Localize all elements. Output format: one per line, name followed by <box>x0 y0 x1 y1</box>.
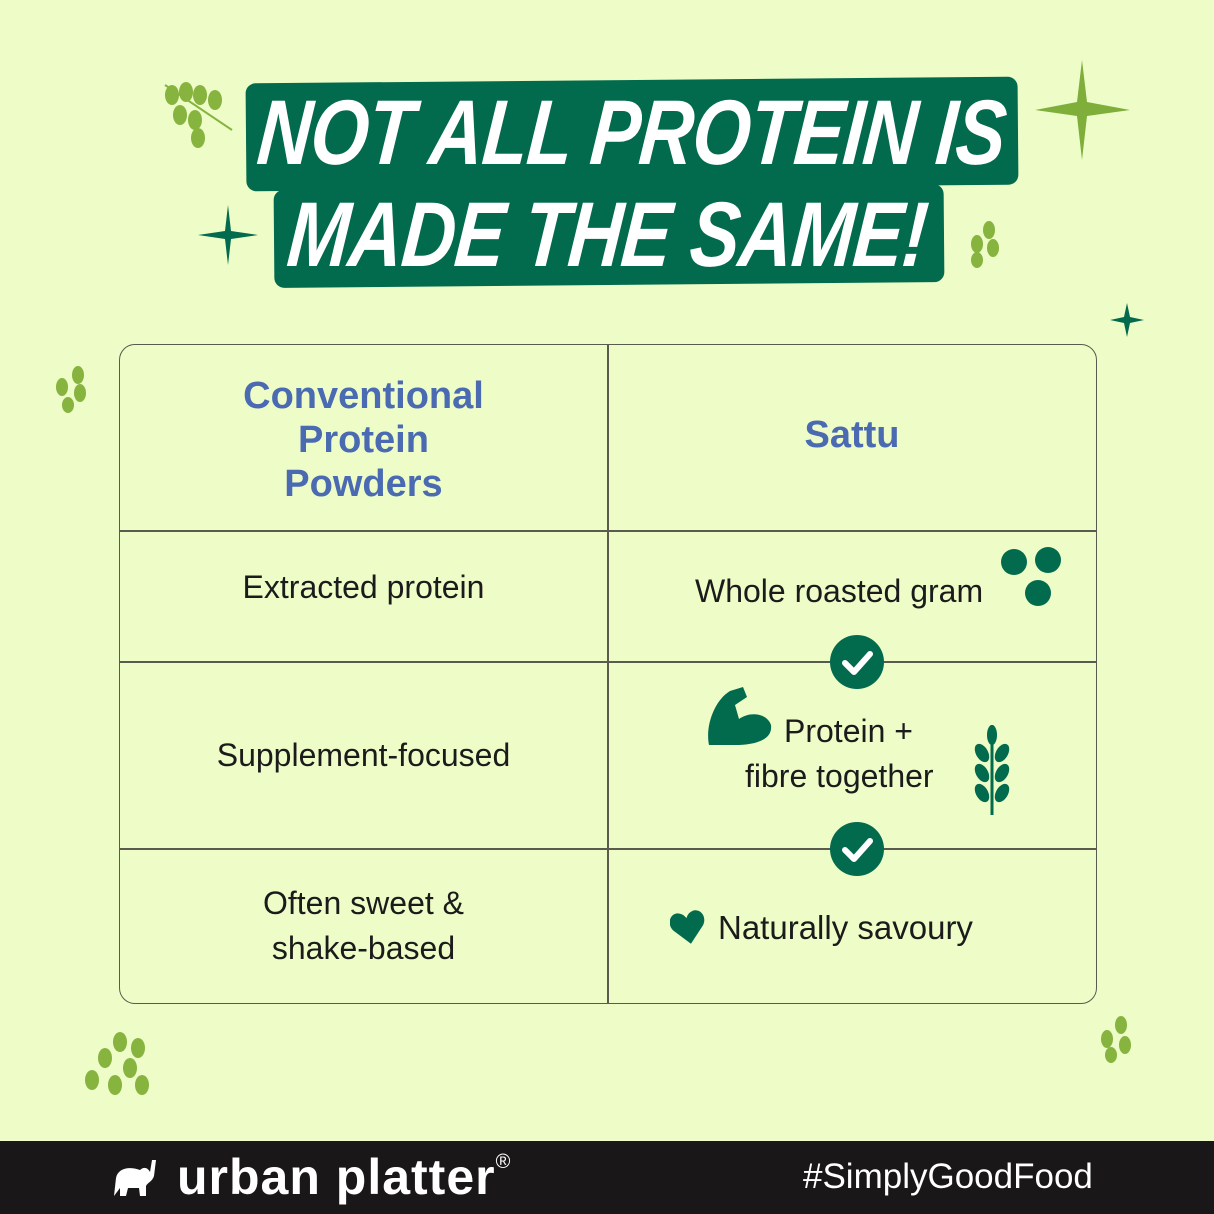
comparison table <box>119 344 1097 1004</box>
text: protein fibre: fibre together <box>745 758 934 794</box>
header: conventional: Conventional <box>243 375 484 417</box>
icon: gram <box>1001 547 1061 606</box>
icon: leaves <box>1101 1016 1131 1063</box>
icon: sparkle large <box>1035 60 1130 160</box>
icon: leaves <box>971 221 999 268</box>
icon: heart <box>670 910 704 944</box>
icon: leaves <box>164 82 232 148</box>
text: often sweet: Often sweet & <box>263 885 464 921</box>
title <box>246 76 1018 288</box>
icon: leaves <box>85 1032 149 1095</box>
icon: muscle <box>708 687 772 745</box>
title: NOT ALL PROTEIN IS <box>254 82 1010 184</box>
hashtag: #SimplyGoodFood <box>803 1157 1093 1196</box>
text: protein fibre <box>745 713 934 794</box>
header: conventional: Protein <box>298 419 429 461</box>
icon: leaves <box>56 366 86 413</box>
icon: check 1 <box>830 635 884 689</box>
text: supplement: Supplement-focused <box>217 736 510 772</box>
text: often sweet: shake-based <box>272 930 455 966</box>
footer <box>0 1141 1214 1214</box>
header: conventional: Powders <box>284 463 443 505</box>
icon: sparkle small <box>198 205 258 265</box>
text: whole roasted gram: Whole roasted gram <box>695 573 983 609</box>
header: conventional <box>243 375 484 505</box>
logo text: urban platter® <box>177 1149 511 1205</box>
icon: wheat <box>974 725 1010 815</box>
text: naturally savoury: Naturally savoury <box>718 909 973 946</box>
text: extracted: Extracted protein <box>243 568 484 604</box>
icon: sparkle right <box>1110 303 1144 337</box>
title: MADE THE SAME! <box>284 184 931 286</box>
icon: check 2 <box>830 822 884 876</box>
text: protein fibre: Protein + <box>784 713 913 749</box>
header: sattu: Sattu <box>804 414 900 456</box>
text: often sweet <box>263 885 464 966</box>
icon: elephant <box>114 1160 156 1196</box>
